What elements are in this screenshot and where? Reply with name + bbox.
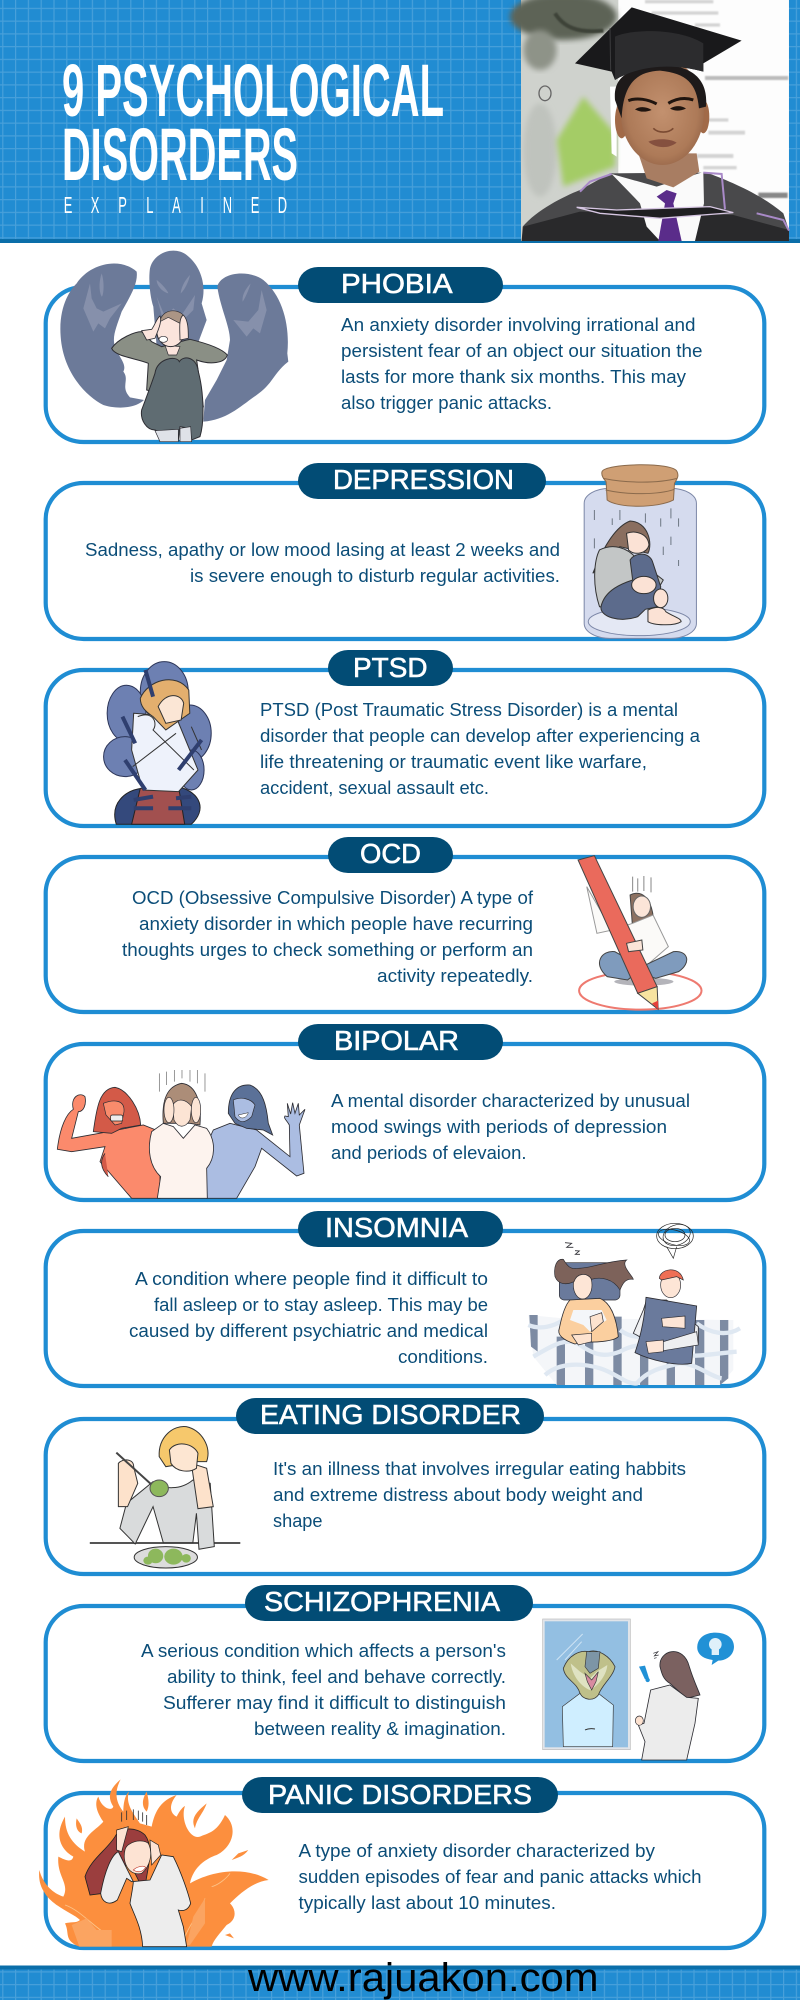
header banner	[0, 0, 800, 243]
panel: insomnia	[46, 1211, 764, 1386]
text: ptsd description: life threatening or traumatic event like warfare,	[260, 751, 647, 772]
text: eating disorder description	[273, 1458, 686, 1531]
text: ocd description: anxiety disorder in which people have recurring	[139, 913, 533, 934]
text: insomnia description: fall asleep or to stay asleep. This may be	[154, 1294, 488, 1315]
text: phobia description: An anxiety disorder involving irrational and	[341, 314, 696, 335]
text: insomnia description: A condition where people find it difficult to	[135, 1268, 488, 1289]
panel: panic disorders	[39, 1777, 764, 1948]
heading pill: bipolar: BIPOLAR	[334, 1025, 459, 1056]
icon: skull speech bubble	[697, 1633, 734, 1665]
text: eating disorder description: and extreme distress about body weight and	[273, 1484, 643, 1505]
heading pill: depression: DEPRESSION	[333, 464, 514, 495]
illustration: woman in circle with giant pencil	[578, 856, 702, 1010]
website url: www.rajuakon.com	[247, 1956, 598, 2000]
title	[62, 49, 444, 196]
text: phobia description: also trigger panic attacks.	[341, 392, 552, 413]
face	[615, 102, 628, 138]
text: bipolar description: and periods of elevaion.	[331, 1142, 526, 1163]
text: phobia description: persistent fear of an object our situation the	[341, 340, 702, 361]
text: ptsd description: PTSD (Post Traumatic Stress Disorder) is a mental	[260, 699, 678, 720]
heading pill: eating disorder: EATING DISORDER	[260, 1399, 521, 1430]
illustration: woman with plate of broccoli	[90, 1426, 240, 1568]
heading pill: phobia	[298, 267, 503, 303]
text: insomnia description	[129, 1268, 488, 1367]
heading pill: ocd	[328, 837, 453, 873]
gown	[522, 173, 789, 241]
heading pill: schizophrenia	[245, 1585, 533, 1621]
panel: eating disorder	[46, 1398, 764, 1574]
title: 9 PSYCHOLOGICAL	[62, 49, 444, 132]
panel: phobia	[46, 251, 764, 442]
text: panic disorders description: sudden episodes of fear and panic attacks which	[298, 1866, 702, 1887]
panel: depression	[46, 463, 764, 639]
text: insomnia description: conditions.	[398, 1346, 488, 1367]
illustration: man surrounded by ghosts	[60, 251, 288, 442]
text: depression description: Sadness, apathy or low mood lasing at least 2 weeks and	[85, 539, 560, 560]
heading pill: phobia: PHOBIA	[341, 268, 453, 299]
text: depression description	[85, 539, 560, 586]
text: ptsd description: disorder that people can develop after experiencing a	[260, 725, 701, 746]
panel: schizophrenia	[46, 1585, 764, 1761]
illustration: woman in a bottle	[584, 465, 696, 638]
heading pill: insomnia: INSOMNIA	[325, 1212, 468, 1243]
text: schizophrenia description: between reality & imagination.	[254, 1718, 506, 1739]
text: bipolar description: A mental disorder characterized by unusual	[331, 1090, 690, 1111]
illustration: woman seeing snake in mirror	[543, 1619, 734, 1760]
panel: ocd	[46, 837, 764, 1012]
illustration: couple in bed	[528, 1221, 740, 1385]
text: phobia description: lasts for more thank six months. This may	[341, 366, 687, 387]
illustration: woman gripped by shadow hands	[104, 662, 211, 824]
text: ocd description: thoughts urges to check something or perform an	[122, 939, 533, 960]
heading pill: insomnia	[298, 1211, 503, 1247]
text: schizophrenia description: Sufferer may find it difficult to distinguish	[163, 1692, 506, 1713]
text: bipolar description: mood swings with periods of depression	[331, 1116, 667, 1137]
text: bipolar description	[331, 1090, 690, 1163]
title: DISORDERS	[62, 113, 298, 196]
subtitle: EXPLAINED	[64, 193, 287, 219]
heading pill: bipolar	[298, 1024, 503, 1060]
text: depression description: is severe enough to disturb regular activities.	[190, 565, 560, 586]
text: schizophrenia description: A serious condition which affects a person's	[141, 1640, 506, 1661]
panel: ptsd	[46, 650, 764, 826]
text: eating disorder description: It's an illness that involves irregular eating habbits	[273, 1458, 686, 1479]
text: eating disorder description: shape	[273, 1510, 322, 1531]
heading pill: ocd: OCD	[360, 838, 421, 869]
text: insomnia description: caused by different psychiatric and medical	[129, 1320, 488, 1341]
text: panic disorders description: A type of anxiety disorder characterized by	[298, 1840, 656, 1861]
illustration: three moods	[57, 1070, 305, 1198]
photo: graduate portrait	[510, 0, 789, 241]
text: panic disorders description: typically last about 10 minutes.	[298, 1892, 556, 1913]
illustration: woman in flames	[39, 1779, 269, 1947]
heading pill: ptsd	[328, 650, 453, 686]
text: ocd description: activity repeatedly.	[377, 965, 533, 986]
text: panic disorders description	[298, 1840, 702, 1913]
footer banner	[0, 1956, 800, 2000]
heading pill: ptsd: PTSD	[353, 652, 428, 683]
text: ptsd description	[260, 699, 701, 798]
heading pill: panic disorders: PANIC DISORDERS	[268, 1779, 532, 1810]
neck	[638, 153, 699, 187]
text: schizophrenia description	[141, 1640, 506, 1739]
text: schizophrenia description: ability to think, feel and behave correctly.	[167, 1666, 506, 1687]
text: ptsd description: accident, sexual assault etc.	[260, 777, 489, 798]
heading pill: schizophrenia: SCHIZOPHRENIA	[264, 1586, 500, 1617]
text: ocd description: OCD (Obsessive Compulsive Disorder) A type of	[132, 887, 534, 908]
text: phobia description	[341, 314, 702, 413]
heading pill: depression	[298, 463, 546, 499]
text: ocd description	[122, 887, 534, 986]
panel: bipolar	[46, 1024, 764, 1200]
mortarboard	[575, 7, 742, 80]
